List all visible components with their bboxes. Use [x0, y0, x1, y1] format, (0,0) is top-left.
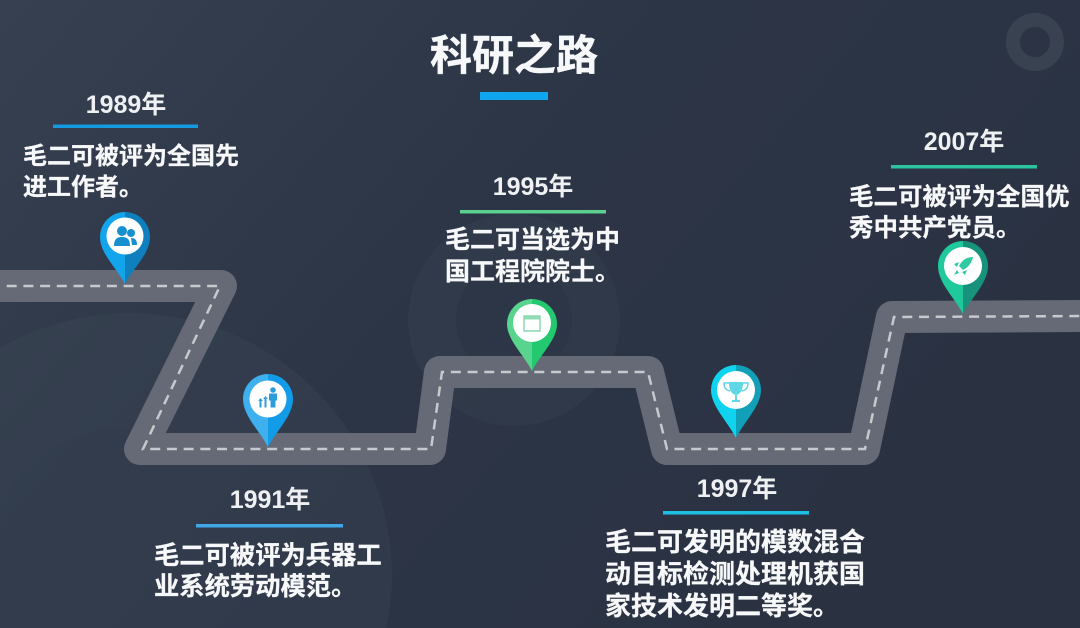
- icon: people pin: [100, 212, 150, 284]
- description 1991: 毛二可被评为兵器工: [154, 542, 382, 570]
- title underline: [480, 92, 548, 100]
- icon: trophy pin: [711, 365, 761, 438]
- year 1997: 1997年: [697, 475, 777, 503]
- rule 1991: [196, 524, 343, 528]
- description 1989: 进工作者。: [23, 174, 143, 201]
- description 2007: 毛二可被评为全国优: [849, 183, 1070, 211]
- icon: rocket pin: [938, 241, 988, 314]
- milestone 1989: [23, 91, 239, 284]
- year 1991: 1991年: [230, 486, 310, 514]
- decorative circle: centre: [408, 214, 620, 426]
- rule 1995: [460, 210, 606, 214]
- year 2007: 2007年: [924, 128, 1004, 156]
- description 1997: 动目标检测处理机获国: [605, 559, 865, 589]
- rule 2007: [891, 165, 1037, 168]
- description 2007: 秀中共产党员。: [849, 214, 1020, 242]
- milestone 2007: [849, 128, 1070, 314]
- road: [0, 286, 1080, 449]
- milestone 1997: [605, 365, 865, 621]
- title: 科研之路: [430, 32, 598, 79]
- description 1991: 业系统劳动模范。: [154, 573, 356, 601]
- description 1997: 家技术发明二等奖。: [605, 591, 839, 621]
- description 1995: 国工程院院士。: [445, 258, 620, 286]
- description 1989: 毛二可被评为全国先: [23, 143, 239, 170]
- description 1995: 毛二可当选为中: [445, 226, 620, 254]
- milestone 1991: [154, 374, 382, 601]
- rule 1997: [663, 511, 809, 514]
- decorative circle: bottom left: [0, 313, 392, 628]
- description 1997: 毛二可发明的模数混合: [605, 527, 865, 557]
- icon: family pin: [243, 374, 293, 447]
- year 1989: 1989年: [86, 91, 166, 119]
- rule 1989: [53, 124, 198, 128]
- year 1995: 1995年: [493, 173, 573, 201]
- icon: calendar pin: [507, 299, 557, 371]
- decorative ring: top right: [1013, 20, 1057, 64]
- milestone 1995: [445, 173, 620, 371]
